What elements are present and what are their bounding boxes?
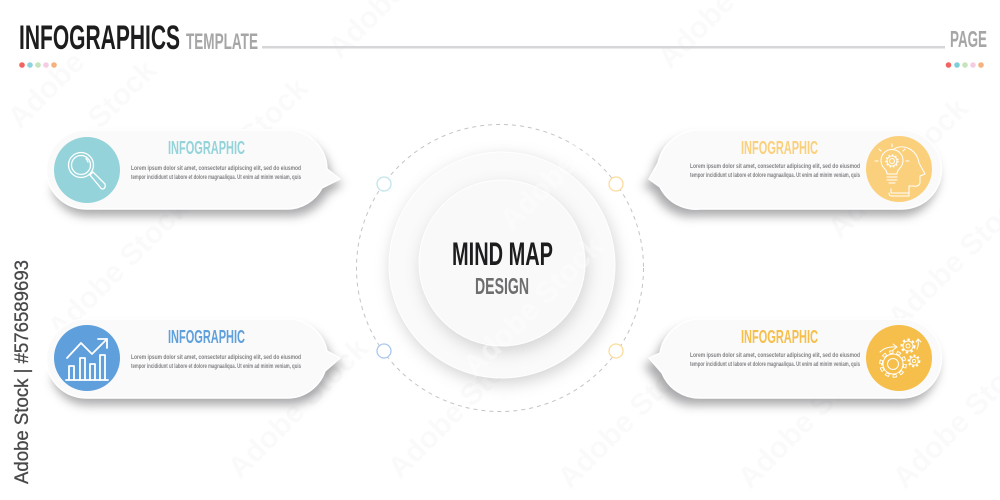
header rule [262, 46, 945, 48]
header dots left [19, 62, 57, 68]
panel: central mind map [356, 84, 647, 412]
card body [47, 130, 340, 209]
subtitle: TEMPLATE [186, 29, 258, 54]
watermark overlay on circles [457, 84, 647, 383]
inner circle [419, 180, 585, 346]
card shadow [52, 327, 343, 405]
card shadow [643, 138, 938, 216]
icon: gears [866, 325, 932, 391]
card heading: INFOGRAPHIC [168, 138, 245, 158]
card text: Lorem ipsum dolor sit amet, consectetur adipiscing elit, sed do eiusmod [690, 164, 860, 170]
outer circle [389, 152, 615, 378]
watermark overlay on circles: Adobe Stock [457, 230, 610, 383]
node bottom-right [609, 344, 623, 358]
outer circle shadow [391, 157, 617, 383]
card text: tempor incididunt ut labore et dolore magnaaliqua. Ut enim ad minim veniam, quis [690, 173, 860, 179]
card text [131, 355, 301, 370]
card text [690, 353, 860, 368]
title: INFOGRAPHICS [19, 19, 180, 57]
inner circle shadow [421, 186, 587, 352]
card text: Lorem ipsum dolor sit amet, consectetur adipiscing elit, sed do eiusmod [131, 166, 301, 172]
card text [131, 166, 301, 181]
node top-left [377, 177, 391, 191]
panel: bottom-left card [47, 319, 343, 405]
card heading: INFOGRAPHIC [168, 327, 245, 347]
card body [649, 130, 942, 209]
panel: top-left card [47, 130, 343, 216]
icon: head with lightbulb [866, 136, 932, 202]
dashed orbit [356, 124, 644, 412]
card shadow [52, 138, 343, 216]
node top-right [609, 177, 623, 191]
card body [649, 319, 942, 398]
card text: tempor incididunt ut labore et dolore magnaaliqua. Ut enim ad minim veniam, quis [690, 362, 860, 368]
card body [47, 319, 340, 398]
icon: bar chart with rising arrow [54, 325, 120, 391]
header dots right [946, 62, 984, 68]
center subheading: DESIGN [475, 273, 529, 299]
center heading: MIND MAP [452, 236, 553, 272]
card heading: INFOGRAPHIC [741, 138, 818, 158]
card text: tempor incididunt ut labore et dolore magnaaliqua. Ut enim ad minim veniam, quis [131, 364, 301, 370]
card heading: INFOGRAPHIC [741, 327, 818, 347]
watermark overlay on circles: Adobe Stock [494, 84, 647, 237]
card shadow [644, 327, 938, 405]
node bottom-left [377, 344, 391, 358]
panel: bottom-right card [644, 319, 942, 405]
card text: Lorem ipsum dolor sit amet, consectetur adipiscing elit, sed do eiusmod [690, 353, 860, 359]
card text [690, 164, 860, 179]
card text: tempor incididunt ut labore et dolore magnaaliqua. Ut enim ad minim veniam, quis [131, 175, 301, 181]
stock id side text: Adobe Stock | #576589693 [12, 260, 33, 484]
card text: Lorem ipsum dolor sit amet, consectetur adipiscing elit, sed do eiusmod [131, 355, 301, 361]
icon: magnifier [54, 137, 120, 203]
panel: top-right card [643, 130, 942, 216]
